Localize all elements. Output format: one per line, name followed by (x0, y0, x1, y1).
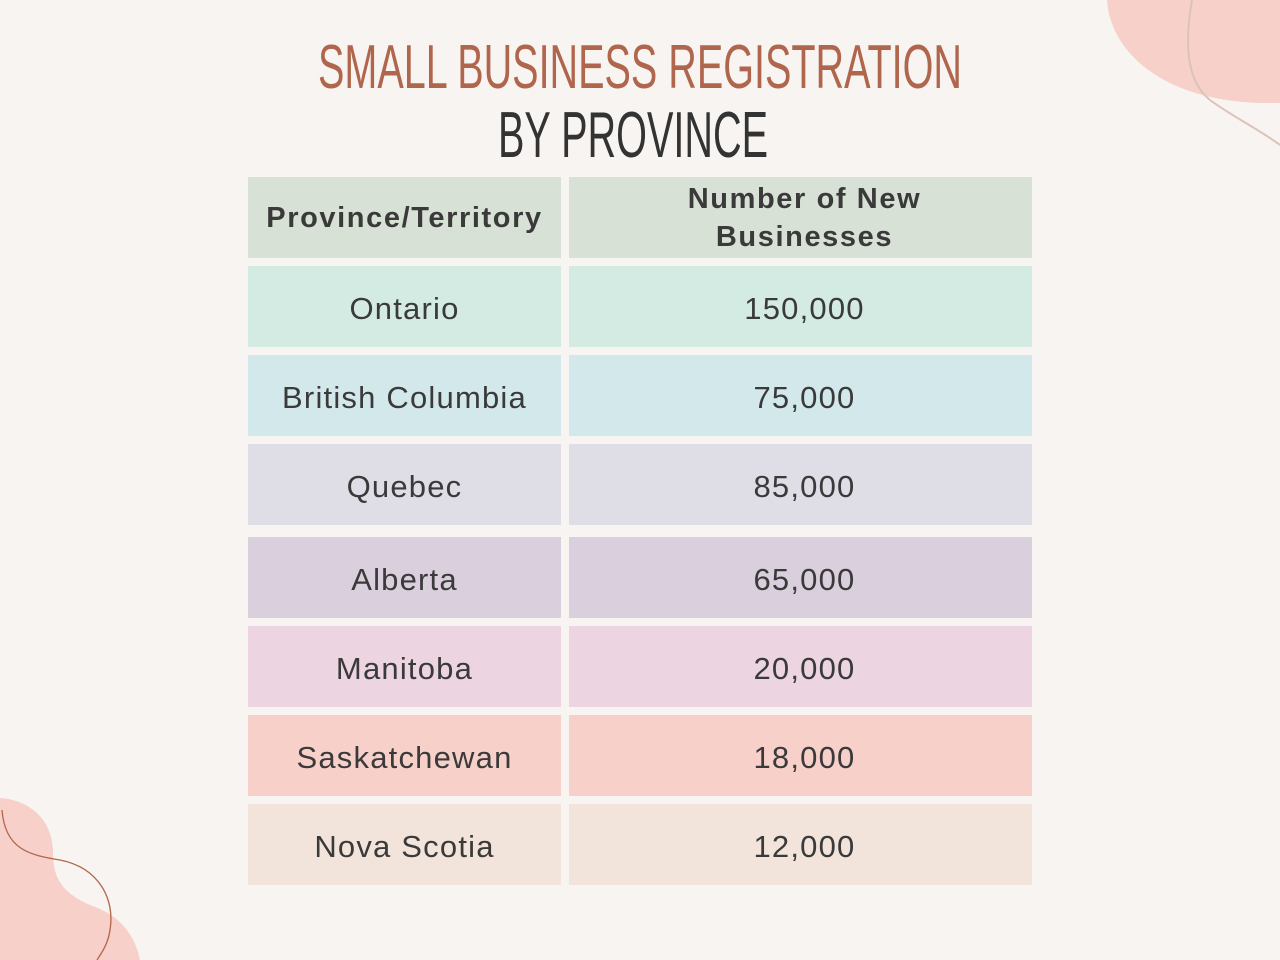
row: Quebec: Quebec (347, 469, 462, 504)
row: Nova Scotia (248, 804, 561, 885)
header: province: Province/Territory (266, 202, 543, 234)
header: number (569, 177, 1032, 258)
table: 12,000 (753, 829, 856, 864)
title (318, 33, 962, 170)
table: 75,000 (753, 380, 856, 415)
row: Quebec (248, 444, 561, 525)
table: 150,000 (744, 291, 865, 326)
row: British Columbia (248, 355, 561, 436)
table: 65,000 (753, 562, 856, 597)
row: Manitoba (248, 626, 561, 707)
table: 20,000 (753, 651, 856, 686)
row: British Columbia: British Columbia (282, 380, 527, 415)
title: BY PROVINCE (498, 98, 768, 170)
row: Alberta (248, 537, 561, 618)
row: Ontario (248, 266, 561, 347)
row: Saskatchewan (248, 715, 561, 796)
row: Manitoba: Manitoba (336, 651, 473, 686)
row: Alberta: Alberta (351, 562, 458, 597)
table: 18,000 (753, 740, 856, 775)
row: Nova Scotia: Nova Scotia (314, 829, 495, 864)
header: number: Number of New (688, 182, 921, 214)
header: number: Businesses (716, 220, 893, 252)
table: 85,000 (753, 469, 856, 504)
row: Ontario: Ontario (349, 291, 460, 326)
row: Saskatchewan: Saskatchewan (296, 740, 513, 775)
header: province (248, 177, 561, 258)
